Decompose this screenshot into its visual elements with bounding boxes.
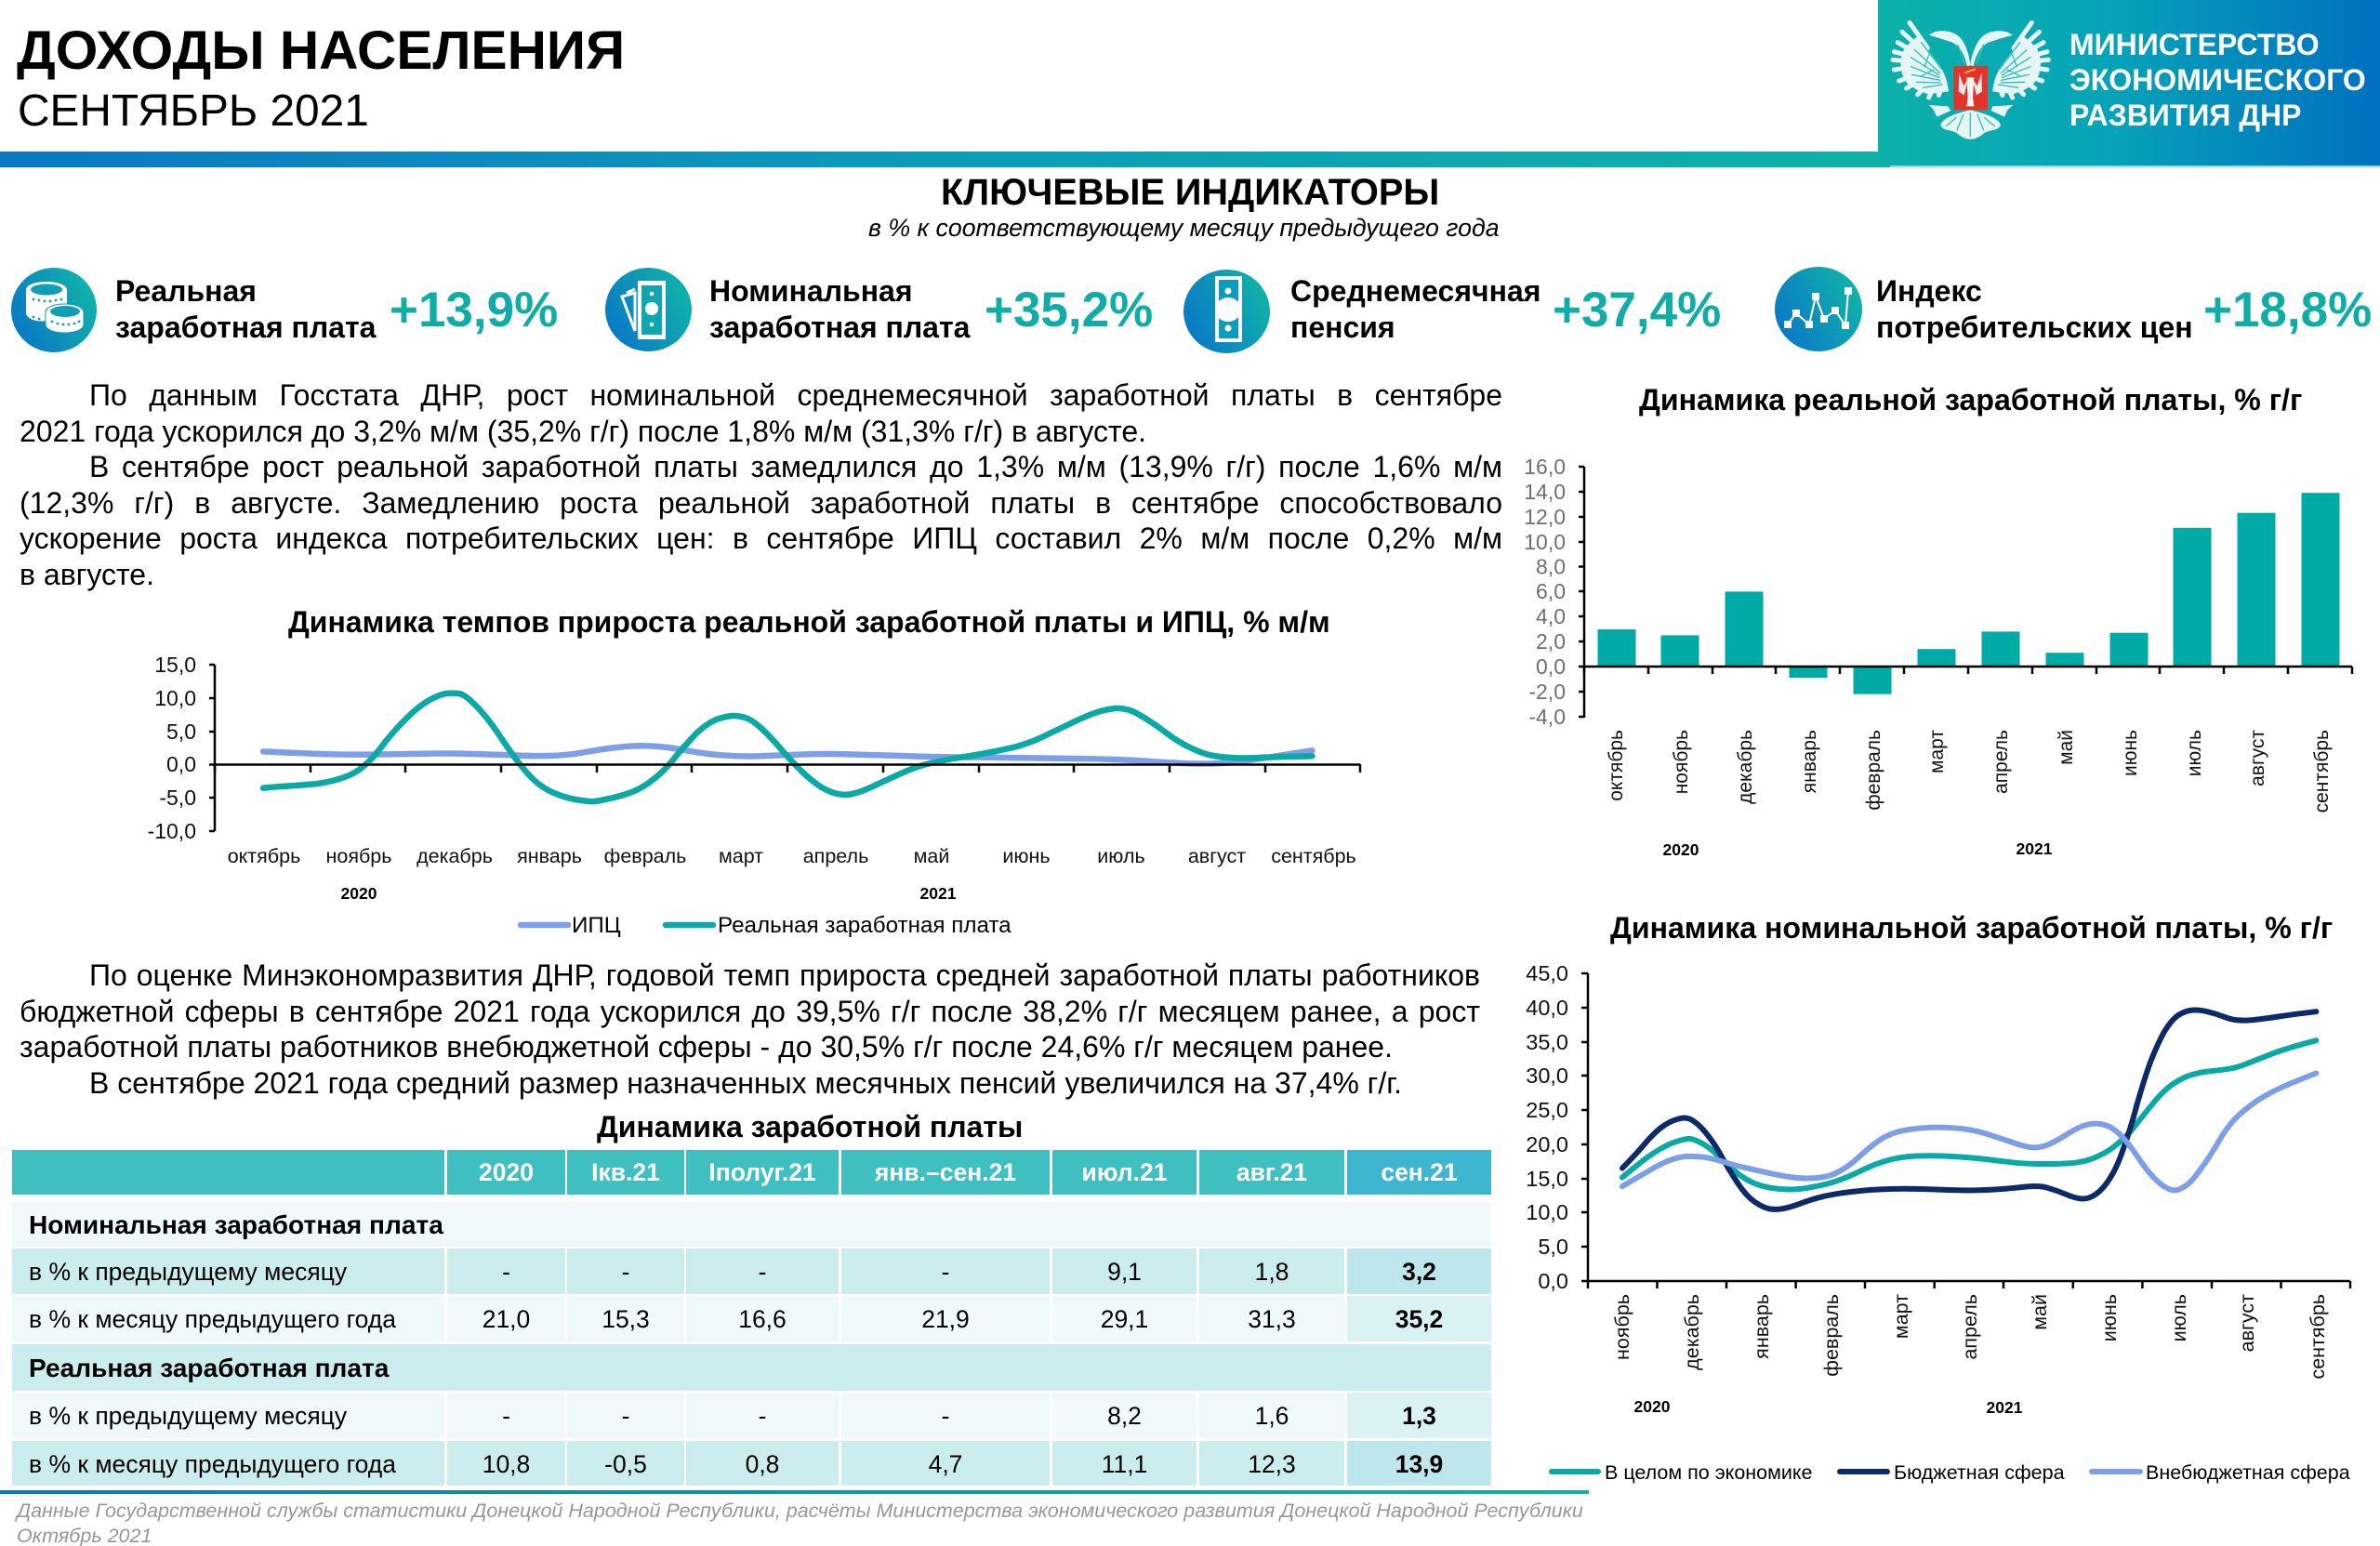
icon: coat of arms eagle (1891, 20, 2051, 139)
row: real m/m: - (502, 1402, 510, 1430)
x axis labels: август (1188, 845, 1246, 867)
icon: pension banknote (1183, 270, 1270, 353)
text block: budget sector and pensions commentary: В сентябре 2021 года средний размер назначенных месячных пенсий увеличился на 37,4% г/г. (89, 1066, 1402, 1100)
y axis labels: 25,0 (1526, 1098, 1568, 1122)
x axis labels: январь (517, 845, 582, 867)
x axis labels: март (719, 845, 763, 867)
legend (521, 913, 1012, 938)
y axis labels: 6,0 (1536, 579, 1566, 603)
label: nominal wage (709, 274, 971, 344)
row: real m/m: - (759, 1402, 766, 1430)
label: nominal wage: Номинальная (709, 274, 913, 308)
y axis labels: 12,0 (1524, 505, 1566, 529)
label: pension: пенсия (1290, 311, 1395, 344)
row: real m/m: 1,3 (1402, 1402, 1436, 1430)
row: nominal m/m (12, 1249, 1491, 1294)
year labels (341, 884, 957, 903)
row: real y/y: -0,5 (604, 1450, 647, 1478)
year labels: 2020 (341, 884, 377, 903)
value: pension: +37,4% (1553, 283, 1721, 337)
year labels (1634, 1397, 2023, 1417)
y axis labels: -2,0 (1528, 680, 1566, 704)
bars (1597, 493, 2339, 694)
row: real y/y: 13,9 (1395, 1450, 1443, 1478)
value: nominal wage: +35,2% (985, 283, 1153, 337)
year labels: 2021 (2016, 839, 2053, 858)
month labels: декабрь (1735, 730, 1756, 804)
month labels: июнь (2098, 1294, 2121, 1341)
x axis labels: июнь (1002, 845, 1051, 867)
y axis labels: 0,0 (1536, 654, 1566, 679)
y axis labels: -4,0 (1528, 705, 1566, 729)
table header row: Iполуг.21 (708, 1158, 816, 1186)
x axis labels: апрель (803, 845, 868, 867)
text block: budget sector and pensions commentary: бюджетной сферы в сентябре 2021 года ускорился до 39,5% г/г после 38,2% г/г месяцем ранее, а рост (20, 995, 1480, 1028)
y axis labels (1524, 455, 1566, 729)
section row: real wage: Реальная заработная плата (29, 1354, 389, 1382)
month labels: март (1926, 730, 1948, 773)
month labels: май (2029, 1294, 2051, 1330)
row: nominal m/m: 9,1 (1107, 1258, 1142, 1286)
text block: budget sector and pensions commentary: По оценке Минэкономразвития ДНР, годовой темп прироста средней заработной платы работников (89, 958, 1480, 992)
legend: В целом по экономике (1605, 1461, 1813, 1484)
row: nominal y/y: 29,1 (1101, 1305, 1148, 1333)
row: real y/y: 12,3 (1248, 1450, 1296, 1478)
month labels: июль (2184, 730, 2205, 776)
month labels: декабрь (1681, 1294, 1703, 1370)
row: nominal y/y: 16,6 (738, 1305, 787, 1333)
year labels (1663, 839, 2053, 859)
row: nominal m/m: - (502, 1258, 510, 1286)
section heading: key indicators: КЛЮЧЕВЫЕ ИНДИКАТОРЫ (941, 172, 1439, 213)
year labels: 2021 (920, 884, 957, 903)
y axis labels: -5,0 (159, 786, 196, 810)
month labels: сентябрь (2307, 1294, 2329, 1380)
section row: nominal wage: Номинальная заработная плата (29, 1210, 443, 1239)
legend (1552, 1461, 2350, 1484)
header bar end under logo (1878, 165, 1890, 167)
label: real wage: Реальная (115, 274, 257, 308)
y axis labels: 35,0 (1526, 1030, 1568, 1054)
year labels: 2021 (1987, 1398, 2023, 1417)
text block: wages commentary: В сентябре рост реальной заработной платы замедлился до 1,3% м/м (13,9% г/г) после 1,6% м/м (89, 450, 1502, 483)
month labels: июль (2168, 1294, 2190, 1341)
subtitle: month: СЕНТЯБРЬ 2021 (18, 86, 369, 136)
icon: coins (11, 268, 97, 352)
legend: Бюджетная сфера (1894, 1461, 2065, 1484)
text block: wages commentary: По данным Госстата ДНР, рост номинальной среднемесячной заработной платы в сентябре (89, 378, 1502, 412)
label: CPI: Индекс (1876, 274, 1982, 308)
chart title: real wage and CPI m/m: Динамика темпов прироста реальной заработной платы и ИПЦ, % м/м (288, 605, 1330, 639)
row: nominal y/y (12, 1296, 1491, 1341)
month labels: февраль (1863, 730, 1884, 811)
text block: wages commentary: в августе. (20, 558, 154, 591)
month labels (1606, 730, 2333, 813)
y axis labels: 40,0 (1526, 996, 1568, 1020)
table header row: сен.21 (1381, 1158, 1458, 1186)
row: nominal m/m: - (942, 1258, 949, 1286)
bar chart: real wage y/y (1524, 455, 2354, 859)
table title: Динамика заработной платы (597, 1110, 1023, 1143)
line chart: real wage and CPI (148, 653, 1361, 938)
month labels: ноябрь (1671, 730, 1692, 794)
text block: budget sector and pensions commentary (20, 958, 1480, 1100)
series: budget sector (1622, 1010, 2316, 1209)
x axis labels: февраль (604, 845, 686, 867)
title: ДОХОДЫ НАСЕЛЕНИЯ (17, 20, 625, 81)
row: real m/m: в % к предыдущему месяцу (29, 1402, 347, 1430)
month labels: июнь (2120, 730, 2141, 776)
value: CPI: +18,8% (2203, 283, 2372, 337)
row: nominal y/y: 35,2 (1395, 1305, 1443, 1333)
month labels: апрель (1990, 730, 2012, 794)
label: CPI (1876, 274, 2193, 344)
y axis labels: 0,0 (1538, 1269, 1568, 1293)
ministry name: ЭКОНОМИЧЕСКОГО (2069, 63, 2366, 97)
y axis labels (1526, 961, 1568, 1293)
icon: banknotes (605, 268, 692, 351)
row: real y/y: 4,7 (929, 1450, 962, 1478)
month labels: февраль (1820, 1294, 1843, 1377)
row: real m/m: - (622, 1402, 629, 1430)
y axis labels (148, 653, 196, 843)
y axis labels: 16,0 (1524, 455, 1566, 479)
row: real m/m (12, 1393, 1491, 1438)
row: real y/y: 11,1 (1102, 1450, 1147, 1478)
text block: budget sector and pensions commentary: заработной платы работников внебюджетной сферы - до 30,5% г/г после 24,6% г/г месяцем ранее. (20, 1030, 1393, 1064)
label: pension: Среднемесячная (1290, 274, 1540, 308)
y axis labels: 2,0 (1536, 629, 1566, 654)
label: pension (1290, 274, 1540, 344)
value: real wage: +13,9% (390, 283, 558, 337)
series: CPI (263, 746, 1312, 764)
x axis labels: декабрь (416, 845, 493, 867)
y axis labels: 10,0 (1524, 530, 1566, 554)
row: nominal m/m: 3,2 (1402, 1258, 1436, 1286)
section subheading: в % к соответствующему месяцу предыдущего года (868, 214, 1500, 242)
table header row: авг.21 (1236, 1158, 1307, 1186)
row: nominal y/y: 31,3 (1248, 1305, 1296, 1333)
x axis labels: октябрь (228, 845, 300, 867)
ministry name: МИНИСТЕРСТВО (2069, 28, 2320, 61)
label: real wage: заработная плата (115, 311, 376, 344)
footer source text: Данные Государственной службы статистики Донецкой Народной Республики, расчёты Министерства экономического развития Донецкой Народной Республики (17, 1500, 1583, 1522)
y axis labels: 14,0 (1524, 480, 1566, 504)
table header row: Iкв.21 (591, 1158, 660, 1186)
icon: price index chart (1775, 267, 1862, 351)
table header row (12, 1150, 1491, 1195)
month labels (1611, 1294, 2329, 1380)
text block: wages commentary: (12,3% г/г) в августе. Замедлению роста реальной заработной платы в сентябре способствовало (20, 486, 1502, 520)
table: wage dynamics (12, 1150, 1491, 1486)
header gradient bar (0, 152, 1878, 167)
x axis labels: ноябрь (326, 845, 391, 867)
month labels: май (2056, 730, 2077, 765)
year labels: 2020 (1634, 1397, 1671, 1416)
month labels: апрель (1959, 1294, 1981, 1360)
ministry name: РАЗВИТИЯ ДНР (2069, 99, 2301, 132)
row: real y/y: в % к месяцу предыдущего года (29, 1450, 396, 1478)
footer gradient line (0, 1490, 1589, 1494)
row: real y/y: 0,8 (746, 1450, 779, 1478)
table header row: янв.–сен.21 (875, 1158, 1016, 1186)
y axis labels: 30,0 (1526, 1064, 1568, 1088)
y axis labels: 15,0 (1526, 1167, 1568, 1191)
series: total economy (1622, 1040, 2316, 1190)
chart title: real wage y/y: Динамика реальной заработной платы, % г/г (1639, 383, 2302, 416)
table header row: июл.21 (1082, 1158, 1167, 1186)
ministry logo panel (1878, 0, 2380, 165)
month labels: сентябрь (2311, 730, 2333, 813)
y axis labels: 10,0 (1526, 1200, 1568, 1224)
month labels: ноябрь (1611, 1294, 1633, 1360)
legend: ИПЦ (572, 913, 621, 938)
text block: wages commentary (20, 378, 1502, 591)
month labels: март (1890, 1294, 1912, 1339)
row: real m/m: 1,6 (1255, 1402, 1289, 1430)
row: nominal m/m: в % к предыдущему месяцу (29, 1258, 347, 1286)
month labels: январь (1751, 1294, 1773, 1359)
legend: Реальная заработная плата (718, 913, 1012, 938)
row: nominal y/y: в % к месяцу предыдущего года (29, 1305, 396, 1333)
x axis labels: сентябрь (1271, 845, 1356, 867)
row: nominal y/y: 21,0 (483, 1305, 530, 1333)
y axis labels: 0,0 (166, 752, 196, 776)
month labels: январь (1799, 730, 1820, 793)
month labels: август (2236, 1294, 2258, 1352)
label: nominal wage: заработная плата (709, 311, 970, 344)
x axis labels: июль (1097, 845, 1145, 867)
month labels: август (2247, 730, 2268, 786)
row: nominal m/m: - (622, 1258, 629, 1286)
table header row: 2020 (479, 1158, 534, 1186)
y axis labels: 5,0 (1538, 1235, 1568, 1259)
row: nominal y/y: 15,3 (602, 1305, 650, 1333)
text block: wages commentary: ускорение роста индекса потребительских цен: в сентябре ИПЦ составил 2% м/м после 0,2% м/м (20, 522, 1502, 555)
label: real wage (115, 274, 377, 344)
row: real y/y (12, 1441, 1491, 1486)
y axis labels: 45,0 (1526, 961, 1568, 985)
year labels: 2020 (1663, 840, 1699, 859)
ministry name (2069, 28, 2366, 132)
header light line (1890, 165, 2380, 167)
legend: Внебюджетная сфера (2146, 1461, 2350, 1484)
x axis labels (228, 845, 1356, 867)
row: real m/m: 8,2 (1107, 1402, 1142, 1430)
y axis labels: -10,0 (148, 819, 196, 843)
text block: wages commentary: 2021 года ускорился до 3,2% м/м (35,2% г/г) после 1,8% м/м (31,3% г/г) в августе. (20, 415, 1146, 448)
row: real y/y: 10,8 (483, 1450, 530, 1478)
x axis labels: май (914, 845, 949, 867)
y axis labels: 10,0 (154, 686, 196, 710)
row: nominal y/y: 21,9 (921, 1305, 970, 1333)
series: non-budget sector (1622, 1073, 2316, 1190)
footer source text (15, 1500, 1583, 1546)
y axis labels: 8,0 (1536, 554, 1566, 578)
label: CPI: потребительских цен (1876, 311, 2193, 344)
y axis labels: 15,0 (154, 653, 196, 677)
y axis labels: 20,0 (1526, 1132, 1568, 1156)
line chart: nominal wage y/y (1526, 961, 2352, 1484)
y axis labels: 5,0 (166, 720, 196, 744)
chart title: nominal wage y/y: Динамика номинальной заработной платы, % г/г (1610, 911, 2333, 945)
row: real m/m: - (942, 1402, 949, 1430)
row: nominal m/m: 1,8 (1255, 1258, 1289, 1286)
series: real wage (263, 694, 1312, 801)
month labels: октябрь (1606, 730, 1627, 801)
y axis labels: 4,0 (1536, 604, 1566, 628)
row: nominal m/m: - (759, 1258, 766, 1286)
